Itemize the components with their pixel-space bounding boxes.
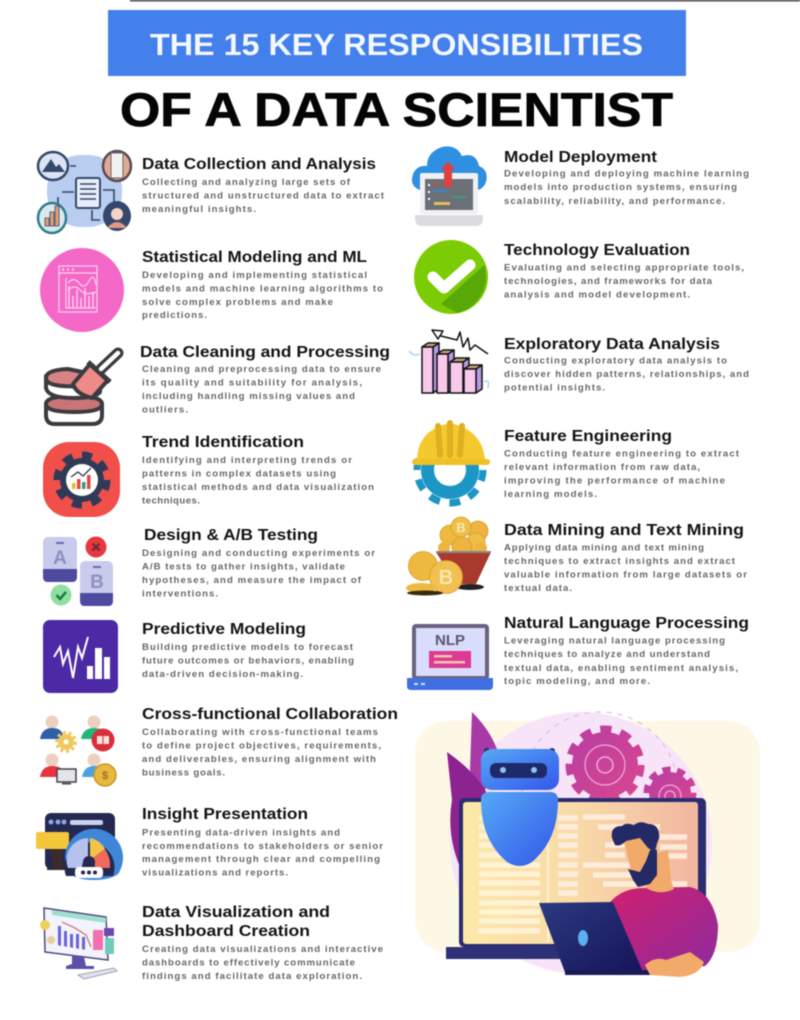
text block: techniques. — [142, 496, 200, 506]
text block: to define project objectives, requirements, — [142, 740, 381, 752]
text block: statistical methods and data visualization — [142, 482, 374, 493]
text block — [142, 548, 375, 600]
icon: gauge dashboard — [36, 813, 123, 880]
text block: Conducting feature engineering to extract — [504, 448, 740, 460]
text block: solve complex problems and make — [142, 297, 333, 308]
text block — [142, 727, 381, 778]
text block: models into production systems, ensuring — [504, 182, 737, 193]
text block: patterns in complex datasets using — [142, 468, 336, 480]
text block: Applying data mining and text mining — [504, 542, 704, 554]
icon: gear with chart — [43, 442, 120, 517]
text block — [142, 270, 383, 321]
icon: statistical chart window — [40, 248, 124, 332]
text block — [504, 262, 744, 300]
text block: visualizations and reports. — [142, 868, 288, 878]
panel: data cleaning and processing — [46, 344, 390, 424]
text block: learning models. — [504, 489, 597, 500]
text block — [504, 356, 749, 394]
text block: Collecting and analyzing large sets of — [142, 177, 351, 188]
text block: Building predictive models to forecast — [142, 642, 354, 653]
text block: predictions. — [142, 310, 207, 321]
text block: textual data, enabling sentiment analysis, — [504, 663, 738, 674]
robot — [481, 748, 559, 866]
text block: textual data. — [504, 583, 572, 594]
icon: team members — [40, 716, 116, 786]
panel: natural language processing — [407, 615, 749, 690]
text block: Identifying and interpreting trends or — [142, 455, 352, 466]
heading: Exploratory Data Analysis — [504, 336, 720, 353]
text block: management through clear and compelling — [142, 854, 380, 865]
icon: A/B cards — [43, 536, 113, 606]
text block: outliers. — [142, 404, 188, 416]
panel: exploratory data analysis — [409, 330, 749, 394]
heading: Feature Engineering — [504, 428, 672, 445]
text block: its quality and suitability for analysis, — [142, 378, 362, 388]
heading: Data Cleaning and Processing — [140, 344, 390, 361]
text block: business goals. — [142, 768, 225, 778]
panel: design and A/B testing — [43, 527, 375, 606]
heading: Cross-functional Collaboration — [142, 706, 398, 723]
text block: Developing and implementing statistical — [142, 270, 367, 281]
heading: Model Deployment — [504, 149, 658, 166]
icon: NLP laptop — [407, 626, 493, 690]
heading: Data Visualization and — [142, 904, 330, 921]
panel: cross-functional collaboration — [40, 706, 398, 786]
heading: Technology Evaluation — [504, 242, 690, 259]
icon: cloud upload laptop — [412, 146, 487, 226]
panel: statistical modeling and ML — [40, 248, 383, 332]
text block — [504, 448, 740, 500]
text block: Leveraging natural language processing — [504, 636, 725, 646]
text block — [504, 542, 747, 594]
text block: data-driven decision-making. — [142, 669, 303, 680]
panel: data mining and text mining — [406, 517, 747, 596]
text block: discover hidden patterns, relationships, and — [504, 369, 749, 380]
text block: dashboards to effectively communicate — [142, 958, 355, 968]
gears — [570, 730, 693, 816]
text block — [504, 636, 738, 687]
panel: data visualization and dashboard creation — [40, 904, 383, 982]
text block: potential insights. — [504, 382, 605, 394]
icon: data collection — [38, 151, 131, 233]
text block: improving the performance of machine — [504, 476, 725, 486]
text block: relevant information from raw data, — [504, 462, 700, 473]
monitor — [446, 798, 706, 959]
text block: A/B tests to gather insights, validate — [142, 562, 345, 572]
icon: purple chart tile — [43, 620, 118, 693]
icon: dashboard monitor — [40, 908, 117, 979]
text block: structured and unstructured data to extract — [142, 190, 385, 202]
text block: techniques to extract insights and extract — [504, 556, 736, 567]
icon: paint brush and discs — [46, 353, 118, 424]
icon: coin cart: B — [456, 520, 466, 535]
text block — [142, 177, 385, 215]
text block: Evaluating and selecting appropriate tools, — [504, 262, 744, 274]
text block: findings and facilitate data exploration. — [142, 971, 362, 982]
text block — [142, 944, 383, 982]
text block: valuable information from large datasets or — [504, 570, 747, 580]
icon: coin cart — [406, 517, 491, 596]
heading: Statistical Modeling and ML — [142, 249, 367, 266]
illustration: data scientist with robot — [415, 712, 760, 977]
panel: technology evaluation — [414, 240, 744, 314]
icon: team members: $ — [102, 770, 108, 782]
icon: bar chart with arrow — [409, 330, 488, 393]
title line 1: THE 15 KEY RESPONSIBILITIES — [150, 27, 643, 62]
text block: future outcomes or behaviors, enabling — [142, 656, 354, 666]
heading: Data Collection and Analysis — [142, 156, 376, 173]
icon: hard hat and gear — [412, 423, 490, 503]
icon: NLP laptop: NLP — [435, 632, 465, 649]
text block: models and machine learning algorithms to — [142, 284, 383, 294]
text block — [142, 828, 383, 878]
text block: topic modeling, and more. — [504, 676, 650, 687]
panel: feature engineering — [412, 423, 740, 503]
text block: technologies, and frameworks for data — [504, 276, 713, 287]
heading: Data Mining and Text Mining — [504, 522, 744, 539]
text block: hypotheses, and measure the impact of — [142, 575, 362, 586]
panel: insight presentation — [36, 806, 383, 880]
heading: Insight Presentation — [142, 806, 308, 823]
text block: Designing and conducting experiments or — [142, 548, 375, 559]
text block: Collaborating with cross-functional teams — [142, 727, 378, 738]
text block: Conducting exploratory data analysis to — [504, 356, 727, 366]
panel: data collection and analysis — [38, 151, 385, 233]
text block: Presenting data-driven insights and — [142, 828, 340, 838]
icon: A/B cards: A — [53, 548, 67, 569]
text block: and deliverables, ensuring alignment with — [142, 754, 376, 765]
heading: Dashboard Creation — [142, 923, 310, 940]
title line 2: OF A DATA SCIENTIST — [120, 83, 673, 136]
panel: trend identification — [43, 434, 374, 517]
person at laptop — [539, 822, 718, 977]
heading: Trend Identification — [142, 434, 304, 451]
heading: Predictive Modeling — [142, 621, 306, 638]
text block: recommendations to stakeholders or senior — [142, 841, 383, 852]
header banner — [108, 10, 686, 76]
heading: Natural Language Processing — [504, 615, 749, 632]
text block — [142, 642, 354, 680]
text block: Cleaning and preprocessing data to ensure — [142, 364, 381, 375]
heading: Design & A/B Testing — [144, 527, 318, 544]
icon: coin cart: B — [439, 567, 453, 589]
panel: predictive modeling — [43, 620, 354, 693]
text block: Creating data visualizations and interactive — [142, 944, 383, 955]
text block: analysis and model development. — [504, 290, 690, 300]
text block: Developing and deploying machine learning — [504, 168, 749, 180]
text block: including handling missing values and — [142, 391, 355, 402]
panel: model deployment — [412, 146, 749, 226]
icon: A/B cards: B — [90, 572, 104, 593]
icon: green check — [414, 240, 488, 314]
heading — [142, 904, 330, 940]
text block — [504, 168, 749, 207]
text block — [142, 455, 374, 506]
text block: meaningful insights. — [142, 204, 256, 215]
text block — [142, 364, 381, 416]
text block: scalability, reliability, and performance. — [504, 196, 725, 207]
text block: techniques to analyze and understand — [504, 649, 710, 660]
text block: interventions. — [142, 588, 218, 600]
